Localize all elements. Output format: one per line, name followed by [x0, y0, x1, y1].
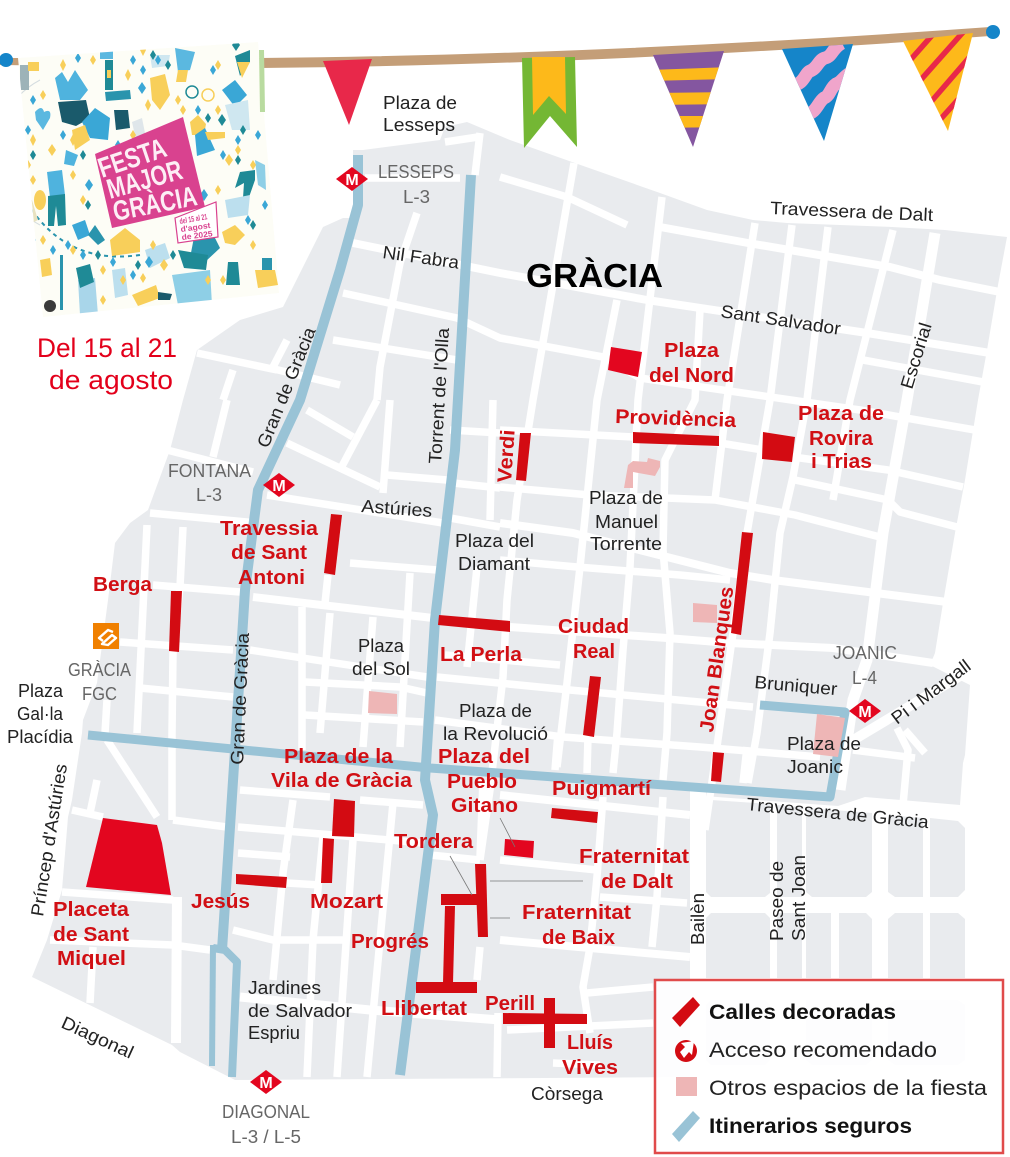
Paseo de Sant Joan: Paseo de [767, 861, 787, 941]
Joanic station: L-4 [852, 668, 877, 688]
Plaza de Rovira i Trias [798, 403, 884, 473]
Fraternitat de Dalt: Fraternitat [579, 846, 689, 868]
legend icon: other spaces [676, 1077, 697, 1096]
Plaza del Nord: Plaza [664, 340, 720, 362]
Jesús: Jesús [191, 891, 250, 913]
poster title [94, 132, 200, 227]
Lluís Vives [562, 1032, 618, 1079]
Lesseps station [378, 162, 454, 207]
legend icon: recommended access [675, 1040, 697, 1062]
Nil Fabra: Nil Fabra [381, 242, 461, 273]
Plaza Gal·la Placídia: Placídia [7, 727, 74, 747]
legend icon: decorated streets [672, 997, 700, 1027]
poster date tag: d'agost [180, 221, 211, 234]
district title: GRÀCIA [526, 257, 663, 294]
safe itineraries: blue routes [88, 155, 845, 1077]
decorated streets [86, 347, 795, 1048]
legend label: recommended access: Acceso recomendado [709, 1039, 937, 1062]
Plaza del Pueblo Gitano: Plaza del [438, 746, 530, 768]
Gràcia FGC station: GRÀCIA [68, 660, 131, 680]
Pi i Margall: Pi i Margall [887, 656, 974, 728]
La Perla: La Perla [440, 644, 523, 666]
Plaza de la Revolució: Plaza de [459, 701, 532, 721]
metro icon: Joanic: M [858, 704, 872, 721]
bunting rope [0, 27, 990, 68]
flag: purple and yellow stripes [653, 51, 724, 147]
Jardines de Salvador Espriu: de Salvador [248, 1001, 352, 1021]
Paseo de Sant Joan [767, 855, 809, 941]
Gran de Gràcia lower: Gran de Gràcia [227, 631, 253, 765]
Gran de Gràcia upper: Gran de Gràcia [253, 323, 320, 450]
Torrent de l'Olla: Torrent de l'Olla [425, 326, 453, 464]
Fraternitat de Dalt [579, 846, 689, 893]
Fraternitat de Dalt: de Dalt [601, 871, 673, 893]
station names [68, 162, 897, 1147]
white streets [50, 133, 1005, 1077]
Plaza de Manuel Torrente: Plaza de [589, 488, 663, 508]
Llibertat: Llibertat [381, 998, 467, 1020]
Plaza de Joanic [787, 734, 861, 777]
Plaza de Joanic: Joanic [787, 757, 843, 777]
Jardines de Salvador Espriu: Espriu [248, 1023, 300, 1043]
Bruniquer: Bruniquer [754, 672, 838, 699]
Plaza de Rovira i Trias: Rovira [809, 428, 874, 450]
Placeta de Sant Miquel: Placeta [53, 899, 130, 921]
Travessia de Sant Antoni: Travessia [220, 518, 319, 540]
Perill: Perill [485, 993, 535, 1015]
metro icon: Joanic [849, 699, 881, 723]
Plaza del Diamant: Plaza del [455, 531, 534, 551]
Progrés: Progrés [351, 931, 429, 953]
Plaza del Diamant: Diamant [458, 554, 530, 574]
Escorial: Escorial [897, 320, 936, 391]
legend label: safe itineraries: Itinerarios seguros [709, 1115, 912, 1138]
legend [655, 980, 1003, 1153]
Plaza Gal·la Placídia: Gal·la [17, 704, 64, 724]
Joanic station [833, 643, 897, 688]
legend label: decorated streets: Calles decoradas [709, 1001, 896, 1024]
metro icon: Diagonal: M [259, 1075, 273, 1092]
Diagonal station [222, 1102, 310, 1147]
Sant Salvador: Sant Salvador [719, 301, 842, 339]
Fraternitat de Baix: Fraternitat [522, 902, 631, 924]
Verdi: Verdi [494, 429, 520, 483]
date text: Del 15 al 21 [37, 333, 177, 363]
metro icon: Lesseps: M [345, 172, 359, 189]
Plaza del Diamant [455, 531, 534, 574]
poster date tag: del 15 al 21 [179, 212, 208, 226]
Plaza de Manuel Torrente: Torrente [590, 534, 662, 554]
Plaza del Sol: Plaza [358, 636, 405, 656]
Fontana station: FONTANA [168, 461, 251, 481]
Còrsega: Còrsega [531, 1084, 604, 1104]
Plaza Gal·la Placídia [7, 681, 74, 747]
Berga: Berga [93, 574, 153, 596]
date text: de agosto [49, 365, 173, 395]
other festival spaces [368, 458, 845, 757]
Plaza de Lesseps: Plaza de [383, 93, 457, 113]
Fraternitat de Baix [522, 902, 631, 949]
Astúries: Astúries [361, 496, 433, 521]
Tordera: Tordera [394, 831, 474, 853]
street map [32, 122, 1007, 1080]
decorated street names [53, 340, 884, 1079]
legend label: other spaces: Otros espacios de la fiesta [709, 1077, 987, 1100]
Diagonal: Diagonal [58, 1012, 137, 1063]
Plaza de la Vila de Gràcia: Vila de Gràcia [271, 770, 413, 792]
Plaza de Lesseps [383, 93, 457, 135]
metro icon: Fontana [263, 473, 295, 497]
Plaza del Nord: del Nord [649, 365, 734, 387]
flag: red [323, 59, 372, 125]
Plaza del Sol: del Sol [352, 659, 410, 679]
metro icon: Fontana: M [272, 478, 286, 495]
Lesseps station: L-3 [403, 187, 430, 207]
Plaza de Joanic: Plaza de [787, 734, 861, 754]
Travessia de Sant Antoni: de Sant [231, 542, 307, 564]
Plaza de la Revolució: la Revolució [443, 724, 548, 744]
poster: Festa Major de Gràcia [0, 39, 279, 317]
Plaza de la Vila de Gràcia: Plaza de la [284, 746, 394, 768]
Paseo de Sant Joan: Sant Joan [789, 855, 809, 941]
Travessera de Dalt: Travessera de Dalt [770, 198, 934, 225]
Placeta de Sant Miquel: de Sant [53, 924, 129, 946]
poster date tag [175, 202, 218, 243]
Plaza Gal·la Placídia: Plaza [18, 681, 64, 701]
poster title: MAJOR [103, 154, 186, 205]
Ciudad Real [558, 616, 629, 663]
metro icon: Lesseps [336, 167, 368, 191]
Lesseps station: LESSEPS [378, 162, 454, 182]
Jardines de Salvador Espriu: Jardines [248, 978, 321, 998]
Joanic station: JOANIC [833, 643, 897, 663]
Puigmartí: Puigmartí [552, 778, 653, 800]
poster title: GRÀCIA [110, 180, 200, 227]
Plaza del Pueblo Gitano: Pueblo [447, 771, 517, 793]
Plaza de Rovira i Trias: Plaza de [798, 403, 884, 425]
Gràcia FGC station [68, 660, 131, 704]
flag: blue with pink waves [782, 43, 853, 141]
poster pink title panel [95, 117, 205, 228]
Plaza de Manuel Torrente [589, 488, 663, 554]
Plaza del Nord [649, 340, 734, 387]
Plaza de la Vila de Gràcia [271, 746, 413, 792]
Fontana station [168, 461, 251, 505]
legend icon: safe itineraries [672, 1111, 700, 1142]
rope end left [0, 53, 13, 67]
Fontana station: L-3 [196, 485, 222, 505]
Gràcia FGC station: FGC [82, 684, 117, 704]
flag: yellow with red stripes [903, 33, 973, 131]
rope end right [986, 25, 1000, 39]
poster illustration [0, 39, 278, 315]
Lluís Vives: Vives [562, 1057, 618, 1079]
Travessia de Sant Antoni: Antoni [238, 567, 305, 589]
Lluís Vives: Lluís [567, 1032, 613, 1054]
Plaza del Pueblo Gitano [438, 746, 530, 817]
city blocks [32, 122, 1007, 1080]
Placeta de Sant Miquel: Miquel [57, 948, 126, 970]
flag: green and yellow banner [522, 57, 577, 148]
poster date tag: de 2025 [181, 229, 214, 242]
Diagonal station: DIAGONAL [222, 1102, 310, 1122]
Placeta de Sant Miquel [53, 899, 130, 970]
Bailèn: Bailèn [688, 893, 708, 945]
Providència: Providència [615, 406, 737, 432]
Jardines de Salvador Espriu [248, 978, 352, 1043]
Príncep d'Astúries: Príncep d'Astúries [27, 762, 71, 918]
Joan Blanques: Joan Blanques [696, 585, 738, 734]
metro icon: Diagonal [250, 1070, 282, 1094]
Plaza del Sol [352, 636, 410, 679]
leader lines [450, 818, 583, 918]
Plaza de Lesseps: Lesseps [383, 115, 455, 135]
Plaza de la Revolució [443, 701, 548, 744]
Plaza de Rovira i Trias: i Trias [811, 451, 872, 473]
Travessia de Sant Antoni [220, 518, 319, 589]
poster title: FESTA [94, 132, 170, 184]
Ciudad Real: Ciudad [558, 616, 629, 638]
Mozart: Mozart [310, 891, 383, 913]
icon: FGC [93, 623, 119, 649]
Travessera de Gràcia: Travessera de Gràcia [746, 794, 931, 832]
date text [37, 333, 177, 395]
Fraternitat de Baix: de Baix [542, 927, 615, 949]
Plaza de Manuel Torrente: Manuel [595, 512, 658, 532]
Diagonal station: L-3 / L-5 [231, 1127, 301, 1147]
Plaza del Pueblo Gitano: Gitano [451, 795, 518, 817]
Ciudad Real: Real [573, 641, 615, 663]
